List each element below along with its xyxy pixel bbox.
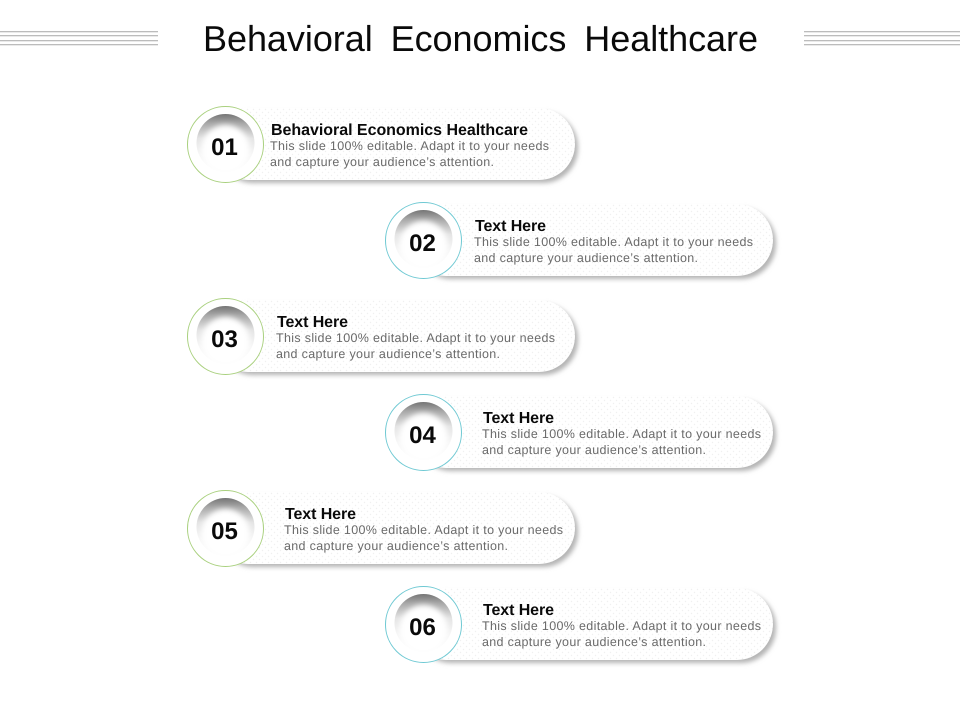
inner well	[394, 210, 452, 268]
body text: This slide 100% editable. Adapt it to your needs	[270, 139, 549, 153]
panel shadow	[416, 208, 776, 279]
number: 02	[409, 230, 436, 257]
panel shadow	[218, 496, 578, 567]
number: 06	[409, 614, 436, 641]
panel	[212, 492, 575, 564]
body text: This slide 100% editable. Adapt it to your needs	[482, 427, 761, 441]
body text	[474, 235, 753, 265]
heading: Behavioral Economics Healthcare	[271, 122, 528, 139]
outer ring	[386, 202, 462, 278]
inner well	[196, 306, 254, 364]
panel	[212, 300, 575, 372]
inner face	[202, 509, 250, 557]
panel shadow	[416, 400, 776, 471]
heading: Text Here	[483, 602, 554, 619]
item 01	[188, 106, 578, 183]
body text: and capture your audience’s attention.	[284, 539, 508, 553]
right title decoration lines	[804, 31, 960, 45]
item 05	[188, 490, 578, 567]
body text	[482, 619, 761, 649]
body text: and capture your audience’s attention.	[482, 635, 706, 649]
body text: This slide 100% editable. Adapt it to your needs	[482, 619, 761, 633]
body text	[482, 427, 761, 457]
inner face	[400, 605, 448, 653]
body text: This slide 100% editable. Adapt it to your needs	[284, 523, 563, 537]
heading: Text Here	[475, 218, 546, 235]
item 06	[386, 586, 776, 663]
outer ring	[386, 394, 462, 470]
inner well	[394, 594, 452, 652]
body text	[270, 139, 549, 169]
inner well	[196, 114, 254, 172]
outer ring	[188, 490, 264, 566]
outer ring	[386, 586, 462, 662]
body text: This slide 100% editable. Adapt it to your needs	[276, 331, 555, 345]
body text: and capture your audience’s attention.	[482, 443, 706, 457]
outer ring	[188, 106, 264, 182]
number: 01	[211, 134, 238, 161]
item 02	[386, 202, 776, 279]
panel	[212, 108, 575, 180]
body text: and capture your audience’s attention.	[270, 155, 494, 169]
panel	[410, 588, 773, 660]
number: 03	[211, 326, 238, 353]
inner well	[196, 498, 254, 556]
outer ring	[188, 298, 264, 374]
body text: and capture your audience’s attention.	[276, 347, 500, 361]
body text	[276, 331, 555, 361]
inner well	[394, 402, 452, 460]
inner face	[400, 221, 448, 269]
number: 04	[409, 422, 436, 449]
inner face	[400, 413, 448, 461]
body text	[284, 523, 563, 553]
item 04	[386, 394, 776, 471]
inner face	[202, 317, 250, 365]
title: Behavioral Economics Healthcare	[203, 18, 758, 59]
heading: Text Here	[483, 410, 554, 427]
number: 05	[211, 518, 238, 545]
panel shadow	[416, 592, 776, 663]
panel shadow	[218, 304, 578, 375]
body text: This slide 100% editable. Adapt it to your needs	[474, 235, 753, 249]
left title decoration lines	[0, 31, 158, 45]
body text: and capture your audience’s attention.	[474, 251, 698, 265]
panel	[410, 396, 773, 468]
item 03	[188, 298, 578, 375]
panel	[410, 204, 773, 276]
panel shadow	[218, 112, 578, 183]
heading: Text Here	[285, 506, 356, 523]
heading: Text Here	[277, 314, 348, 331]
inner face	[202, 125, 250, 173]
